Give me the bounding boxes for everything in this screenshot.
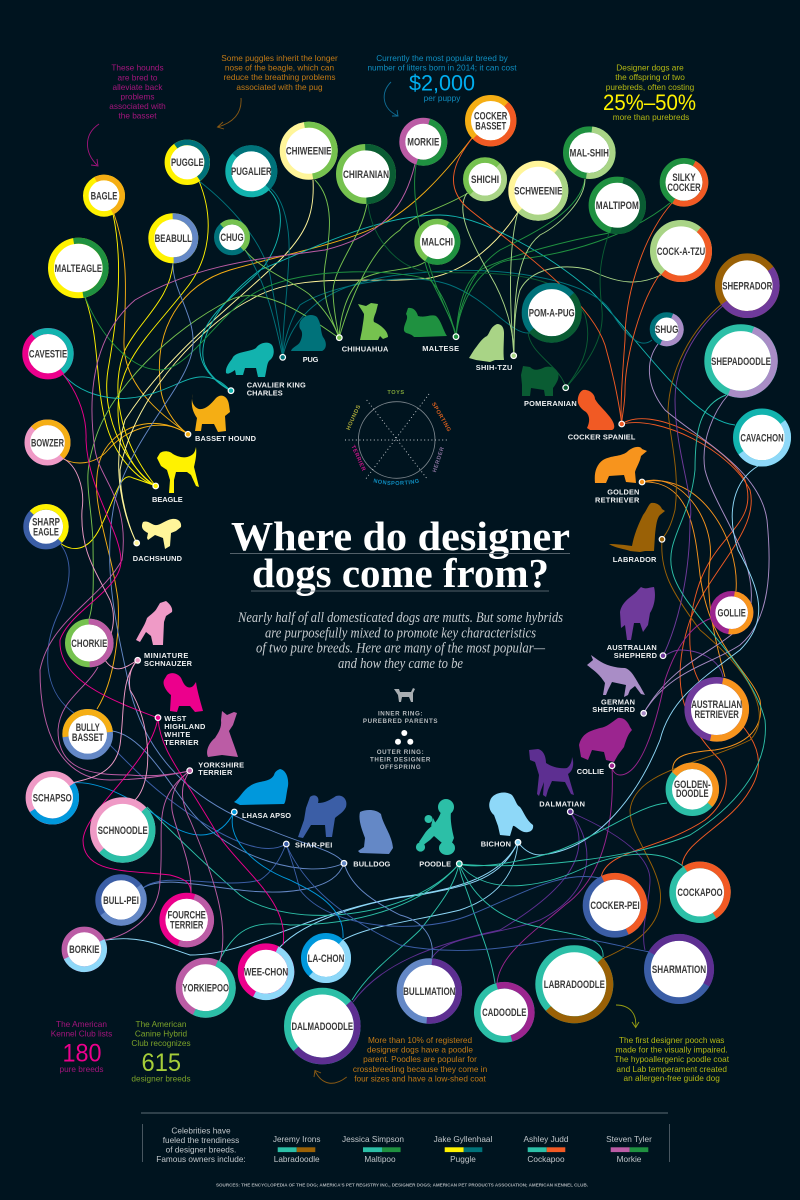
ring: australian retriever (682, 675, 751, 744)
ring: chorkie (68, 622, 111, 664)
dog: australian shepherd: AUSTRALIAN (607, 643, 657, 652)
owner: ashley judd (524, 1135, 569, 1164)
ring: shichi (458, 152, 512, 206)
ring: labradoodle: LABRADOODLE (544, 979, 605, 991)
title (230, 513, 570, 596)
ring: malchi (409, 214, 465, 270)
note: first designer pooch: made for the visually impaired. (616, 1046, 728, 1055)
dog: pomeranian (521, 366, 577, 408)
arrow: to dalmadoodle (314, 1070, 347, 1083)
dog: poodle (416, 799, 462, 868)
ring: schnoodle: SCHNOODLE (98, 825, 148, 837)
note: puggles: nose of the beagle, which can (225, 64, 334, 73)
breed group wheel: HOUNDS (346, 404, 362, 431)
dog: yorkshire terrier: YORKSHIRE (198, 760, 244, 770)
stat: kennel club 180: 180 (62, 1040, 102, 1068)
ring: bully basset: BASSET (72, 732, 104, 744)
ring: sharp eagle: EAGLE (33, 526, 59, 538)
note: first designer pooch: and Lab temperament created (616, 1065, 727, 1074)
breed group wheel: TERRIER (349, 445, 366, 473)
annotations and arrows (51, 54, 730, 1084)
ring: chug: CHUG (220, 232, 244, 244)
dog: west highland white terrier: WHITE (164, 730, 190, 739)
ring: shepadoodle: SHEPADOODLE (711, 356, 771, 368)
ring: golden-doodle (659, 756, 725, 822)
panel intro text: of designer breeds. (166, 1146, 236, 1154)
arrow: to puggle (218, 98, 241, 129)
dog: west highland white terrier: HIGHLAND (164, 722, 206, 731)
dog: australian shepherd (607, 587, 666, 660)
note: basset hounds: are bred to (118, 73, 158, 82)
dog: pomeranian: POMERANIAN (524, 399, 577, 408)
owner: jeremy irons: Jeremy Irons (273, 1135, 321, 1144)
ring: bagle: BAGLE (91, 190, 118, 202)
dog: golden retriever: GOLDEN (607, 488, 639, 496)
dog: australian shepherd: SHEPHERD (614, 651, 658, 660)
ring: golden-doodle: DOODLE (676, 788, 709, 800)
note: poodle parents: parent. Poodles are popular for (363, 1055, 477, 1064)
ring: cadoodle: CADOODLE (482, 1007, 527, 1019)
ring: cockapoo: COCKAPOO (677, 887, 723, 899)
dog: labrador (609, 503, 665, 564)
breed group wheel (345, 390, 452, 485)
intro paragraph: and how they came to be (338, 656, 464, 672)
dog: bichon: BICHON (481, 840, 511, 848)
panel intro text: Famous owners include: (156, 1155, 246, 1164)
dog: collie: COLLIE (577, 767, 604, 776)
ring: dalmadoodle: DALMADOODLE (291, 1021, 353, 1033)
ring: malteagle (47, 236, 110, 300)
owner: jeremy irons (273, 1135, 321, 1164)
ring: yorkiepoo: YORKIEPOO (182, 983, 229, 995)
ring: beabull (151, 216, 195, 260)
dog: maltese: MALTESE (422, 344, 459, 353)
dog: dachshund (133, 519, 183, 563)
ring: chiweenie: CHIWEENIE (286, 145, 332, 157)
note: poodle parents: More than 10% of registered (368, 1036, 472, 1045)
note: first designer pooch: The hypoallergenic poodle coat (614, 1055, 730, 1064)
celebrity owners panel (141, 1113, 670, 1164)
owner: ashley judd: Cockapoo (527, 1155, 565, 1164)
dog: miniature schnauzer: SCHNAUZER (144, 659, 193, 668)
legend text: inner ring: INNER RING: (378, 710, 423, 718)
ring: mal-shih: MAL-SHIH (570, 147, 609, 159)
ring: sheprador (707, 245, 788, 326)
ring: borkie (58, 923, 111, 976)
ring: sharp eagle: SHARP (32, 516, 60, 528)
dog: shih-tzu: SHIH-TZU (476, 363, 512, 372)
ring: wee-chon (232, 938, 300, 1006)
note: poodle parents (353, 1036, 488, 1084)
ring: bully basset (64, 710, 112, 758)
ring: bowzer: BOWZER (31, 437, 64, 449)
note: designer dog cost (603, 64, 696, 122)
dog: maltese (404, 308, 459, 353)
note: morkie price: number of litters born in 2014; it can cost (367, 64, 517, 73)
owner: steven tyler: Steven Tyler (606, 1135, 652, 1144)
ring: sharp eagle (18, 499, 74, 555)
ring: la-chon: LA-CHON (308, 953, 344, 965)
ring: chiweenie (279, 121, 338, 180)
intro paragraph: Nearly half of all domesticated dogs are mutts. But some hybrids (237, 610, 563, 626)
dog: basset hound: BASSET HOUND (195, 434, 257, 443)
ring: schnoodle (81, 788, 164, 872)
dog: shar-pei (284, 795, 346, 850)
note: basset hounds: the basset (118, 111, 157, 120)
stat: hybrid club 615: Club recognizes (131, 1039, 191, 1048)
ring: sheprador: SHEPRADOR (722, 281, 772, 293)
ring: shug (648, 310, 686, 348)
dog: cavalier king charles: CAVALIER KING (247, 380, 306, 390)
dog: lhasa apso (232, 769, 291, 820)
ring: wee-chon: WEE-CHON (244, 967, 288, 979)
ring: sharmation: SHARMATION (652, 964, 706, 976)
note: basset hounds (109, 64, 166, 120)
dog: cocker spaniel: COCKER SPANIEL (568, 432, 636, 442)
dog: yorkshire terrier (187, 711, 244, 777)
owner: jake gyllenhaal: Jake Gyllenhaal (434, 1135, 493, 1144)
ring: bull-pei: BULL-PEI (103, 895, 139, 907)
breed group wheel: HERDER (432, 446, 446, 473)
ring: mal-shih (563, 126, 616, 179)
ring: cocker basset: COCKER (474, 110, 507, 122)
owner: jake gyllenhaal (434, 1135, 493, 1164)
stat: hybrid club 615: The American (136, 1020, 187, 1029)
ring: bullmation: BULLMATION (403, 986, 455, 998)
owner: jessica simpson: Jessica Simpson (342, 1135, 404, 1144)
ring: cock-a-tzu: COCK-A-TZU (657, 246, 705, 258)
ring: malchi: MALCHI (422, 236, 453, 248)
dog: bulldog (341, 810, 393, 868)
ring: dalmadoodle (273, 977, 372, 1075)
dog: miniature schnauzer (135, 601, 193, 668)
note: puggles: associated with the pug (236, 83, 323, 92)
stat: kennel club 180: Kennel Club lists (51, 1030, 112, 1038)
ring: silky cocker (655, 153, 713, 212)
ring: maltipom: MALTIPOM (596, 200, 639, 212)
dog: german shepherd: GERMAN (601, 698, 635, 706)
legend text: inner ring: PUREBRED PARENTS (363, 718, 438, 725)
dog: bichon (481, 793, 533, 848)
dog: bulldog: BULLDOG (353, 860, 391, 868)
intro paragraph (237, 610, 563, 672)
note: basset hounds: alleviate back (112, 83, 163, 92)
ring: cocker basset (459, 89, 523, 153)
ring: cadoodle (471, 979, 537, 1045)
legend text: outer ring: THEIR DESIGNER (370, 756, 431, 764)
dog: cavalier king charles: CHARLES (247, 388, 283, 398)
ring: fourche terrier: TERRIER (170, 920, 203, 932)
ring: golden-doodle: GOLDEN- (674, 779, 711, 791)
ring: shug: SHUG (655, 324, 678, 336)
ring: bullmation (397, 959, 461, 1023)
owner: jessica simpson (342, 1135, 404, 1164)
ring: pom-a-pug (514, 275, 589, 350)
ring: morkie (397, 115, 450, 168)
panel intro text: Celebrities have (171, 1126, 231, 1136)
ring: pom-a-pug: POM-A-PUG (529, 308, 575, 320)
intro paragraph: of two pure breeds. Here are many of the most popular— (256, 640, 545, 656)
ring: puggle: PUGGLE (171, 157, 204, 169)
panel intro text (156, 1126, 246, 1164)
dog: chihuahua (336, 303, 389, 354)
dog: poodle: POODLE (419, 860, 451, 868)
icon: purebred dog (394, 688, 415, 702)
ring: schweenie (500, 153, 576, 229)
dog: german shepherd: SHEPHERD (592, 705, 636, 714)
note: basset hounds: problems (121, 92, 154, 101)
ring: cavestie (16, 322, 80, 386)
dog: shar-pei: SHAR-PEI (295, 840, 332, 850)
breed connection curves (40, 136, 769, 1002)
note: designer dog cost: purebreds, often costing (606, 83, 695, 92)
note: morkie price: per puppy (424, 94, 461, 103)
note: puggles (221, 54, 338, 92)
ring: australian retriever: AUSTRALIAN (691, 699, 742, 711)
ring: chorkie: CHORKIE (71, 638, 108, 650)
note: basset hounds: associated with (109, 102, 166, 111)
ring: shepadoodle (698, 318, 784, 404)
stat: kennel club 180: pure breeds (59, 1065, 104, 1074)
dog: basset hound (185, 394, 257, 443)
legend text: inner ring (363, 710, 438, 725)
stat: hybrid club 615: 615 (142, 1049, 181, 1077)
dog: miniature schnauzer: MINIATURE (144, 651, 188, 660)
ring: pugalier: PUGALIER (231, 166, 272, 178)
sources: SOURCES: THE ENCYCLOPEDIA OF THE DOG; AMERICA'S PET REGISTRY INC., DESIGNER DOGS; AMERICAN PET PRODUCTS ASSOCIATION; AMERICAN KENNEL CLUB. (216, 1182, 588, 1187)
ring: cockapoo (662, 855, 738, 930)
arrow: to morkie (384, 82, 398, 116)
arrow: to bagle (87, 124, 99, 166)
ring legend (363, 688, 438, 771)
ring: bull-pei (89, 868, 153, 932)
dog: golden retriever: RETRIEVER (595, 496, 640, 504)
note: morkie price: Currently the most popular breed by (376, 54, 509, 63)
dog: golden retriever (595, 447, 647, 504)
legend text: outer ring (370, 749, 431, 771)
legend text: outer ring: OUTER RING: (377, 749, 424, 756)
dog: beagle (152, 447, 199, 504)
ring: chiranian (339, 147, 393, 201)
note: basset hounds: These hounds (111, 64, 164, 73)
note: poodle parents: four sizes and have a low-shed coat (354, 1074, 487, 1084)
ring: schweenie: SCHWEENIE (514, 185, 563, 197)
stat: hybrid club 615: Canine Hybrid (135, 1030, 188, 1038)
breed group wheel: TOYS (387, 390, 405, 396)
stat: kennel club 180: The American (56, 1020, 107, 1029)
ring: cocker basset: BASSET (475, 120, 506, 132)
dog: labrador: LABRADOR (613, 555, 657, 564)
ring: fourche terrier: FOURCHE (168, 910, 206, 922)
dog: dalmatian: DALMATIAN (539, 800, 585, 808)
stat: hybrid club 615 (131, 1020, 191, 1084)
owner: jessica simpson: Maltipoo (364, 1155, 396, 1164)
ring: bowzer (19, 414, 76, 471)
note: designer dog cost: Designer dogs are (616, 64, 684, 73)
owner: jeremy irons: Labradoodle (274, 1155, 320, 1164)
dog: dachshund: DACHSHUND (133, 554, 183, 563)
note: puggles: Some puggles inherit the longer (221, 54, 338, 63)
dog: german shepherd (587, 655, 646, 716)
ring: silky cocker: COCKER (667, 182, 701, 194)
dog: cavalier king charles (226, 343, 306, 398)
arrow: to labradoodle (616, 1005, 639, 1028)
stat: hybrid club 615: designer breeds (131, 1074, 191, 1084)
dog: cocker spaniel (568, 390, 636, 442)
ring: cavachon (726, 401, 798, 474)
ring: maltipom (586, 174, 649, 237)
breed group wheel: SPORTING (430, 402, 452, 433)
icon: offspring dots (395, 730, 413, 745)
note: designer dog cost: the offspring of two (615, 73, 685, 82)
note: designer dog cost: 25%–50% (603, 90, 696, 115)
ring: malteagle: MALTEAGLE (55, 263, 102, 275)
note: first designer pooch (614, 1036, 730, 1083)
ring: shichi: SHICHI (471, 174, 499, 186)
dog: west highland white terrier: WEST (164, 714, 187, 723)
ring: pugalier (219, 139, 284, 204)
ring: yorkiepoo (170, 952, 241, 1023)
note: puggles: reduce the breathing problems (224, 73, 335, 82)
ring: beabull: BEABULL (155, 233, 192, 245)
ring: gollie (710, 591, 754, 635)
ring: sharmation (636, 926, 722, 1012)
owner: jake gyllenhaal: Puggle (450, 1155, 476, 1164)
ring: bully basset: BULLY (76, 722, 100, 734)
intro paragraph: are purposefully mixed to promote key characteristics (265, 626, 536, 642)
dog: west highland white terrier: TERRIER (164, 738, 199, 747)
note: designer dog cost: more than purebreds (613, 113, 689, 122)
ring: chiranian: CHIRANIAN (343, 169, 389, 181)
ring: labradoodle (524, 934, 624, 1034)
title: Where do designer (231, 513, 570, 559)
ring: schapso: SCHAPSO (33, 793, 72, 805)
dog: dalmatian (529, 749, 585, 814)
ring: cocker-pei: COCKER-PEI (590, 900, 640, 912)
owner: steven tyler (606, 1135, 652, 1164)
title: dogs come from? (252, 550, 549, 596)
dog: west highland white terrier (155, 673, 206, 747)
stat: kennel club 180 (51, 1020, 112, 1074)
note: poodle parents: crossbreeding because they come in (353, 1065, 488, 1074)
ring: fourche terrier (156, 889, 218, 951)
note: morkie price: $2,000 (409, 71, 475, 96)
ring: gollie: GOLLIE (718, 608, 746, 620)
dog: yorkshire terrier: TERRIER (198, 768, 233, 777)
note: first designer pooch: The first designer pooch was (619, 1036, 724, 1045)
legend text: outer ring: OFFSPRING (380, 764, 421, 771)
dog: chihuahua: CHIHUAHUA (342, 344, 389, 354)
ring: borkie: BORKIE (69, 944, 100, 956)
owner: steven tyler: Morkie (617, 1155, 642, 1164)
breed group wheel: NONSPORTING (374, 478, 419, 485)
ring: silky cocker: SILKY (672, 172, 696, 184)
panel intro text: fueled the trendiness (163, 1136, 239, 1145)
dog: pug (280, 315, 326, 364)
note: morkie price (367, 54, 517, 103)
ring: schapso (20, 765, 85, 830)
ring: australian retriever: RETRIEVER (695, 709, 739, 721)
ring: morkie: MORKIE (407, 136, 440, 148)
dog: beagle: BEAGLE (152, 495, 183, 504)
owner: ashley judd: Ashley Judd (524, 1135, 569, 1144)
ring: chug (210, 216, 254, 259)
ring: cocker-pei (576, 867, 654, 944)
dog: pug: PUG (303, 355, 319, 364)
note: first designer pooch: an allergen-free guide dog (624, 1074, 720, 1083)
ring: bagle (80, 171, 128, 220)
ring: cavestie: CAVESTIE (29, 349, 67, 361)
dog: collie (577, 718, 632, 776)
dog: shih-tzu (469, 324, 516, 372)
purebred dogs (133, 303, 666, 868)
ring: la-chon (295, 927, 357, 989)
ring: cock-a-tzu (642, 212, 720, 290)
dog: lhasa apso: LHASA APSO (242, 811, 291, 820)
note: poodle parents: designer dogs have a poodle (367, 1046, 473, 1055)
ring: puggle (160, 135, 215, 190)
